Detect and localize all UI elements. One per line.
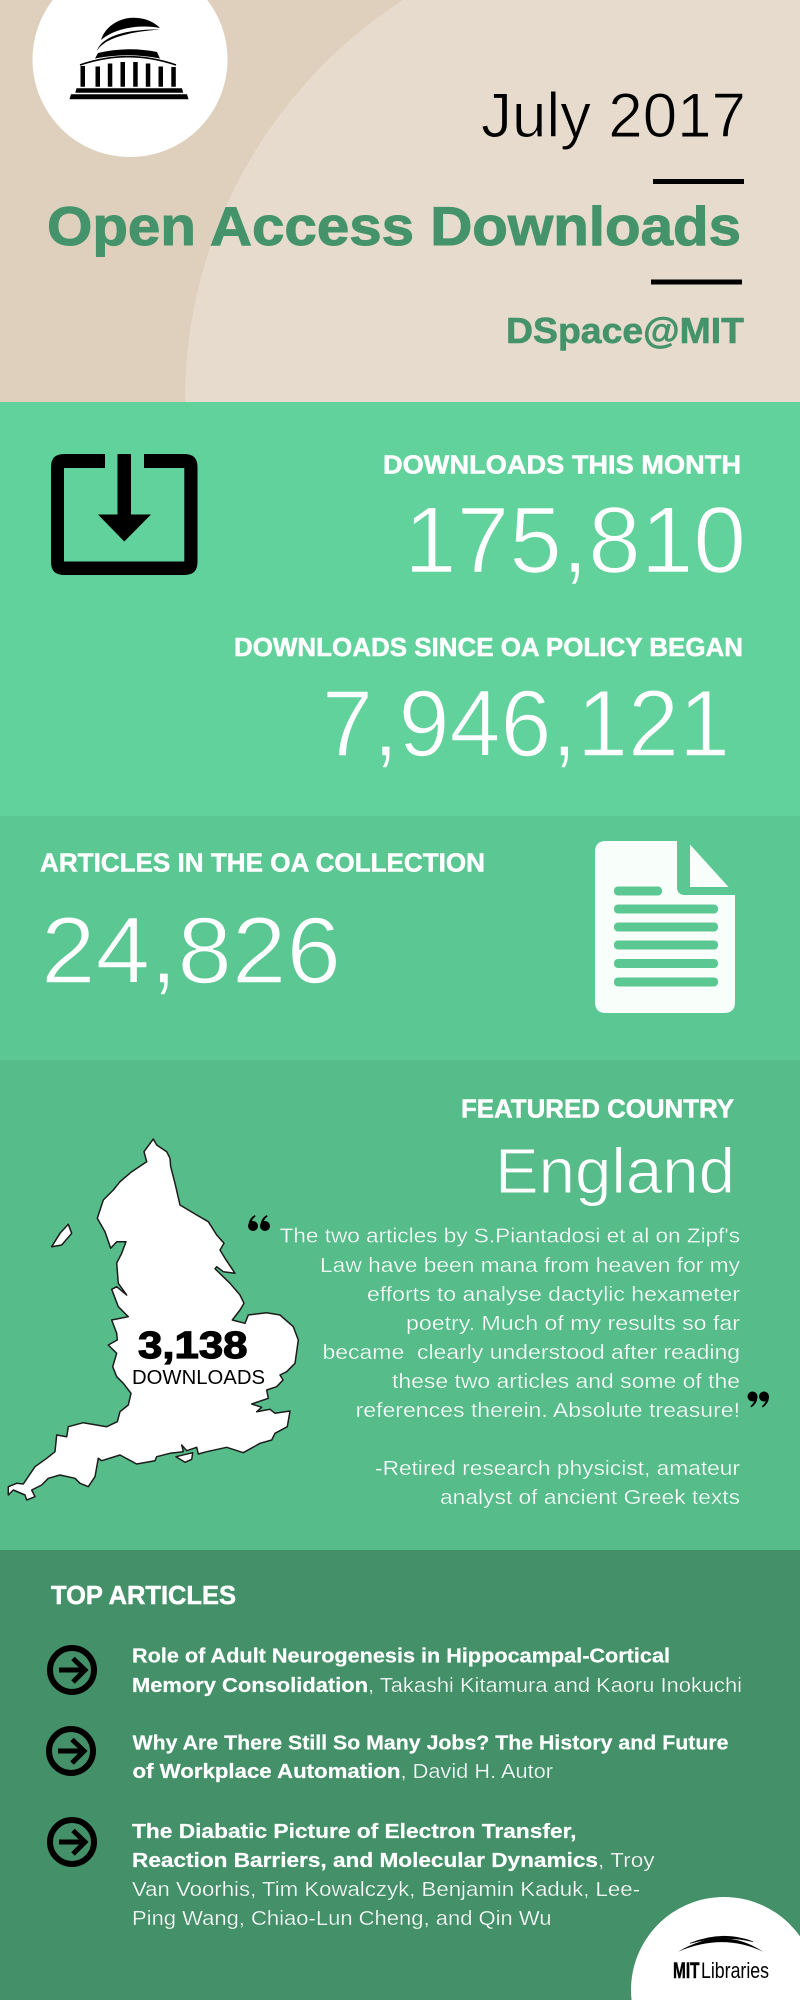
- icon: opening quote: [248, 1215, 270, 1231]
- icon: download arrow in box: [51, 454, 198, 575]
- article 3: [50, 1820, 655, 1930]
- stat: downloads since OA policy began: [234, 632, 743, 777]
- subtitle: DSpace@MIT: [506, 310, 744, 351]
- icon: MIT Libraries logo: MIT: [673, 1958, 700, 1983]
- icon: document: [595, 841, 735, 1013]
- stat: downloads this month: DOWNLOADS THIS MONTH: [383, 449, 741, 479]
- icon: MIT Libraries logo: Libraries: [701, 1958, 769, 1983]
- quote text: efforts to analyse dactylic hexameter: [367, 1284, 740, 1306]
- quote text: poetry. Much of my results so far: [406, 1313, 740, 1335]
- article 1: Role of Adult Neurogenesis in Hippocampal-Cortical: [132, 1646, 670, 1668]
- article 3: Ping Wang, Chiao-Lun Cheng, and Qin Wu: [132, 1908, 552, 1930]
- quote attribution: [375, 1458, 740, 1509]
- quote attribution: analyst of ancient Greek texts: [440, 1487, 740, 1509]
- icon: arrow circle 2: [49, 1729, 93, 1773]
- icon: arrow circle 1: [50, 1648, 94, 1692]
- quote attribution: -Retired research physicist, amateur: [375, 1458, 740, 1480]
- quote text: [280, 1226, 740, 1422]
- article 3: The Diabatic Picture of Electron Transfer,: [132, 1821, 576, 1843]
- stat: articles: 24,826: [41, 898, 341, 1004]
- article 2: [49, 1729, 728, 1783]
- map figure: 3,138 downloads: 3,138: [138, 1325, 248, 1367]
- heading: top articles: TOP ARTICLES: [51, 1580, 236, 1610]
- quote text: references therein. Absolute treasure!: [356, 1400, 740, 1422]
- map figure: 3,138 downloads: [132, 1325, 265, 1389]
- article 3: Reaction Barriers, and Molecular Dynamics: [132, 1850, 598, 1872]
- stat: downloads since OA policy began: DOWNLOADS SINCE OA POLICY BEGAN: [234, 632, 743, 662]
- map: England: [8, 1139, 298, 1500]
- stat: articles: ARTICLES IN THE OA COLLECTION: [40, 848, 485, 878]
- icon: MIT Libraries logo: [631, 1897, 800, 2000]
- quote text: became clearly understood after reading: [322, 1342, 740, 1364]
- quote text: The two articles by S.Piantadosi et al on Zipf's: [280, 1226, 740, 1248]
- divider line top: [653, 179, 744, 184]
- article 1: , Takashi Kitamura and Kaoru Inokuchi: [368, 1675, 742, 1697]
- article 3: Van Voorhis, Tim Kowalczyk, Benjamin Kaduk, Lee-: [132, 1879, 640, 1901]
- icon: closing quote: [748, 1392, 769, 1408]
- heading: featured country: FEATURED COUNTRY: [461, 1094, 734, 1124]
- stat: downloads since OA policy began: 7,946,121: [322, 671, 730, 777]
- panel: header: [0, 0, 800, 876]
- icon: MIT dome logo: [32, 0, 228, 157]
- title: Open Access Downloads: [47, 195, 741, 257]
- map figure: 3,138 downloads: DOWNLOADS: [132, 1367, 265, 1389]
- divider line bottom: [651, 280, 742, 284]
- stat: downloads this month: 175,810: [404, 488, 746, 594]
- header background arc: [185, 0, 800, 876]
- article 2: Why Are There Still So Many Jobs? The History and Future: [132, 1732, 728, 1754]
- date heading: July 2017: [481, 81, 746, 151]
- panel: downloads: [0, 402, 800, 816]
- stat: downloads this month: [383, 449, 746, 594]
- panel: top articles: [0, 1550, 800, 2000]
- article 3: , Troy: [598, 1850, 655, 1872]
- heading: England: England: [495, 1135, 735, 1207]
- article 1: [50, 1646, 742, 1697]
- article 2: of Workplace Automation: [132, 1761, 400, 1783]
- quote text: these two articles and some of the: [392, 1371, 740, 1393]
- article 1: Memory Consolidation: [132, 1675, 368, 1697]
- panel: articles in collection: [0, 816, 800, 1060]
- icon: arrow circle 3: [50, 1820, 94, 1864]
- quote text: Law have been mana from heaven for my: [320, 1255, 740, 1277]
- stat: articles: [40, 848, 485, 1004]
- panel: featured country: [0, 1060, 800, 1550]
- article 2: , David H. Autor: [400, 1761, 553, 1783]
